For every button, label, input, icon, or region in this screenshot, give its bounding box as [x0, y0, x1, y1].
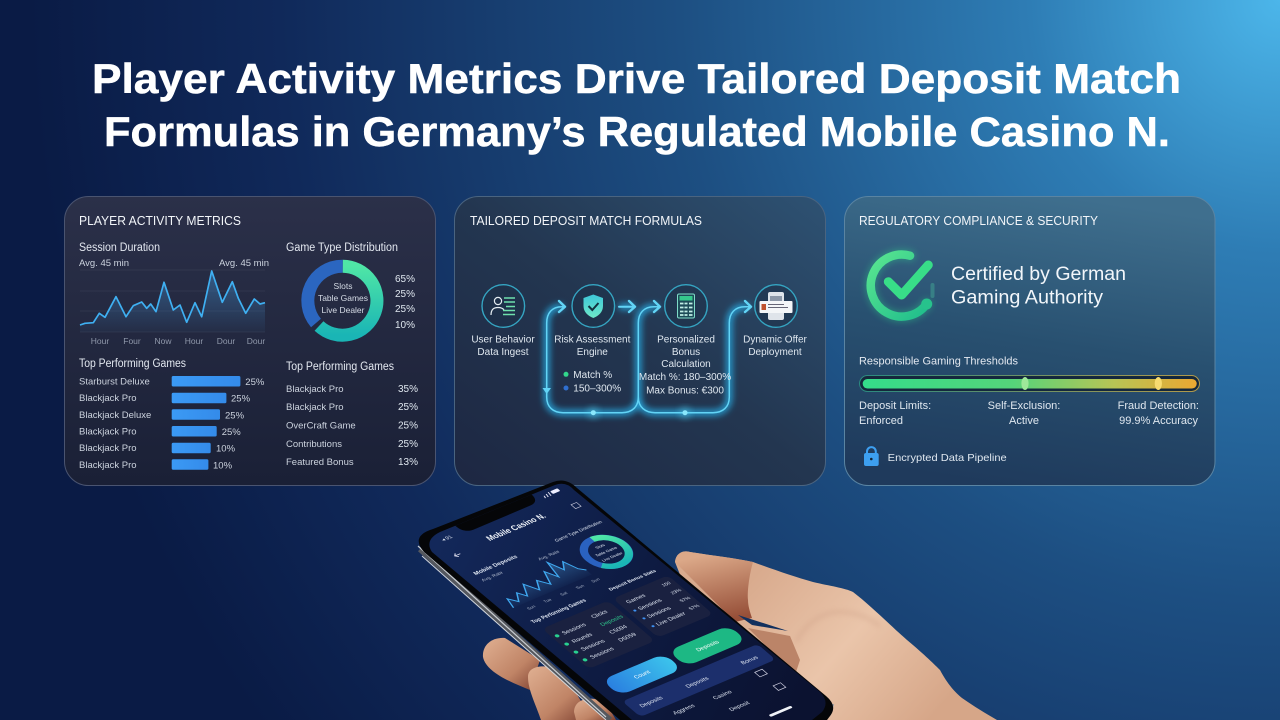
bar chart: top performing games: Blackjack Pro: [79, 426, 137, 438]
bar chart: top performing games: 10%: [216, 444, 236, 455]
table: top performing games: [286, 361, 418, 468]
table: top performing games: 25%: [398, 439, 418, 450]
phone table left: C5094: [608, 624, 630, 635]
bar chart: top performing games: Blackjack Deluxe: [79, 410, 151, 421]
table: top performing games: OverCraft Game: [286, 420, 356, 432]
back arrow: [454, 553, 460, 557]
panel heading: player activity: PLAYER ACTIVITY METRICS: [79, 213, 241, 228]
table: top performing games: Top Performing Games: [286, 361, 394, 373]
label: dynamic offer deployment: Deployment: [748, 347, 802, 358]
phone table right: 57%: [688, 603, 702, 612]
panel: regulatory compliance and security: [844, 196, 1215, 486]
phone donut: Slots: [594, 543, 606, 550]
panel: tailored deposit match formulas: [454, 196, 826, 486]
phone table left: Sessions: [580, 639, 607, 652]
home indicator: [769, 706, 793, 717]
certification statement: Gaming Authority: [951, 288, 1104, 308]
phone table right: 23%: [670, 588, 684, 596]
donut chart: game type distribution: Table Games: [318, 293, 368, 303]
bar chart: top performing games: 25%: [222, 427, 241, 438]
table: top performing games: Blackjack Pro: [286, 384, 344, 395]
label: match and max bonus: Max Bonus: €300: [646, 385, 724, 396]
line chart: session duration: Avg. 45 min: [79, 258, 129, 269]
phone chart: Avg. Rate: [537, 549, 562, 562]
bar chart: top performing games: [79, 358, 265, 471]
threshold labels: Active: [1009, 415, 1039, 427]
bar chart: top performing games: Blackjack Pro: [79, 443, 137, 454]
phone chart: Tue: [542, 597, 553, 604]
palm crease: [796, 612, 880, 642]
status bar: [442, 488, 582, 540]
bar chart: top performing games: Blackjack Pro: [79, 460, 137, 471]
phone table right: Games: [625, 594, 648, 605]
donut chart: game type distribution: 65%: [395, 274, 415, 285]
certification statement: [951, 264, 1126, 308]
phone table left: Sessions: [589, 647, 616, 660]
phone table right: Deposit Bonus Stats: [608, 569, 658, 592]
notch: [456, 494, 536, 531]
line chart: session duration: [79, 242, 269, 346]
phone chart: Sun: [574, 583, 586, 590]
legend: match range: 150–300%: [573, 384, 621, 394]
table: top performing games: Blackjack Pro: [286, 402, 344, 413]
screen: [429, 484, 826, 720]
bar chart: top performing games: 25%: [231, 394, 251, 405]
flow connectors: [542, 301, 751, 419]
icon: offer deployment: [755, 285, 797, 327]
label: user behavior: Data Ingest: [477, 347, 529, 358]
phone tab bar: Deposits: [685, 676, 711, 689]
threshold labels: Enforced: [859, 415, 903, 427]
phone chart: Sun: [526, 604, 537, 611]
label: personalized bonus calculation: Bonus: [672, 347, 700, 358]
icon: user behavior: [482, 285, 525, 327]
threshold labels: Self-Exclusion:: [988, 400, 1060, 412]
screen contents: [442, 488, 792, 717]
phone table right: Live Dealer: [655, 612, 688, 627]
legend: match range: [564, 370, 621, 394]
line chart: session duration: Dour: [247, 336, 265, 346]
button: blue: [606, 656, 677, 692]
table: top performing games: Contributions: [286, 439, 342, 450]
label: risk assessment engine: Risk Assessment: [554, 334, 630, 346]
label: risk assessment engine: Engine: [577, 347, 608, 358]
label: user behavior: User Behavior: [471, 334, 535, 346]
phone table right: 150: [661, 581, 673, 588]
phone donut: [554, 521, 634, 569]
phone table right: 57%: [679, 596, 693, 604]
phone tab bar: Deposit: [728, 701, 752, 713]
donut chart: game type distribution: Game Type Distribution: [286, 242, 398, 254]
phone table left: Deposits: [599, 615, 625, 628]
threshold labels: Fraud Detection:: [1118, 400, 1199, 412]
phone body: [419, 480, 833, 720]
bar chart: top performing games: Starburst Deluxe: [79, 376, 150, 388]
phone chart: [473, 550, 600, 610]
phone donut: Game Type Distribution: [554, 520, 604, 543]
phone chart: Sat: [559, 591, 569, 597]
phone tab bar: [624, 645, 786, 716]
label: match and max bonus: Match %: 180–300%: [639, 372, 731, 383]
phone tab bar: Casino: [712, 690, 734, 701]
phone table left: [530, 599, 652, 667]
button: blue: Count: [633, 670, 653, 680]
label: personalized bonus calculation: Calculation: [661, 359, 711, 370]
phone donut: Table Game: [594, 545, 619, 558]
table: top performing games: 13%: [398, 457, 418, 468]
phone chart: Sun: [590, 577, 602, 583]
threshold meter: [859, 356, 1200, 392]
phone tab bar: Deposits: [639, 696, 665, 709]
phone table right: Sessions: [637, 598, 664, 612]
icon: certified check: [871, 255, 932, 317]
shadow under thumb web: [748, 628, 800, 690]
donut chart: game type distribution: [286, 242, 415, 335]
donut chart: game type distribution: Slots: [334, 281, 352, 291]
phone table right: Sessions: [646, 606, 673, 619]
icon: calculator: [665, 285, 707, 327]
donut chart: game type distribution: Live Dealer: [322, 305, 365, 315]
bar chart: top performing games: Top Performing Games: [79, 358, 186, 370]
table: top performing games: 35%: [398, 384, 418, 395]
line chart: session duration: Hour: [91, 336, 109, 346]
table: top performing games: Featured Bonus: [286, 457, 354, 468]
phone chart: Avg. Rate: [480, 571, 505, 583]
phone: [418, 476, 833, 720]
threshold labels: Deposit Limits:: [859, 400, 931, 412]
line chart: session duration: Avg. 45 min: [219, 258, 269, 269]
phone table left: D5059: [617, 632, 639, 643]
phone table left: Rounds: [571, 633, 594, 645]
bar chart: top performing games: 25%: [245, 377, 265, 388]
phone table left: Sessions: [561, 623, 588, 636]
finger gap: [738, 615, 788, 631]
donut chart: game type distribution: 10%: [395, 320, 415, 331]
label: encrypted pipeline: Encrypted Data Pipeline: [888, 452, 1007, 464]
icon: shield: [572, 285, 615, 327]
threshold labels: [859, 400, 1199, 427]
donut chart: game type distribution: 25%: [395, 289, 415, 300]
table: top performing games: 25%: [398, 420, 418, 432]
label: dynamic offer deployment: Dynamic Offer: [743, 334, 807, 346]
palm: [675, 551, 997, 720]
phone table right: [608, 570, 710, 636]
panel: player activity metrics: [64, 196, 436, 486]
line chart: session duration: Now: [154, 336, 172, 346]
table: top performing games: 25%: [398, 402, 418, 413]
line chart: session duration: Dour: [217, 336, 235, 346]
line chart: session duration: Session Duration: [79, 242, 160, 254]
line chart: session duration: Hour: [185, 336, 203, 346]
threshold meter: Responsible Gaming Thresholds: [859, 356, 1018, 368]
label: personalized bonus calculation: Personalized: [657, 334, 715, 346]
donut chart: game type distribution: 25%: [395, 304, 415, 315]
index finger: [675, 551, 753, 622]
status bar: ◂ 91: [440, 535, 454, 543]
bar chart: top performing games: 25%: [225, 410, 245, 421]
phone tab bar: Bonus: [740, 655, 760, 666]
title: Player Activity Metrics Drive Tailored Deposit Match: [92, 55, 1181, 102]
bar chart: top performing games: 10%: [213, 460, 233, 471]
phone donut: Live Dealer: [600, 551, 624, 562]
phone table left: Clicks: [590, 610, 610, 620]
threshold labels: 99.9% Accuracy: [1119, 415, 1198, 427]
phone chart: Mobile Deposits: [473, 554, 520, 577]
line chart: session duration: Four: [123, 336, 141, 346]
fingers: [483, 638, 616, 720]
button: green: [673, 628, 742, 664]
hand holding phone: [483, 551, 997, 720]
certification statement: Certified by German: [951, 264, 1126, 285]
phone table left: Top Performing Games: [530, 598, 589, 625]
icon: lock: [864, 447, 879, 466]
app title: Mobile Casino N.: [484, 512, 548, 542]
title: Formulas in Germany’s Regulated Mobile Casino N.: [104, 108, 1170, 155]
button: green: Deposits: [695, 640, 721, 653]
phone side band: [418, 546, 833, 720]
panel heading: deposit formulas: TAILORED DEPOSIT MATCH FORMULAS: [470, 213, 702, 228]
bar chart: top performing games: Blackjack Pro: [79, 393, 137, 404]
panel heading: compliance: REGULATORY COMPLIANCE & SECURITY: [859, 213, 1098, 228]
phone tab bar: Aggress: [672, 704, 697, 716]
legend: match range: Match %: [573, 370, 612, 381]
title: [92, 55, 1181, 155]
